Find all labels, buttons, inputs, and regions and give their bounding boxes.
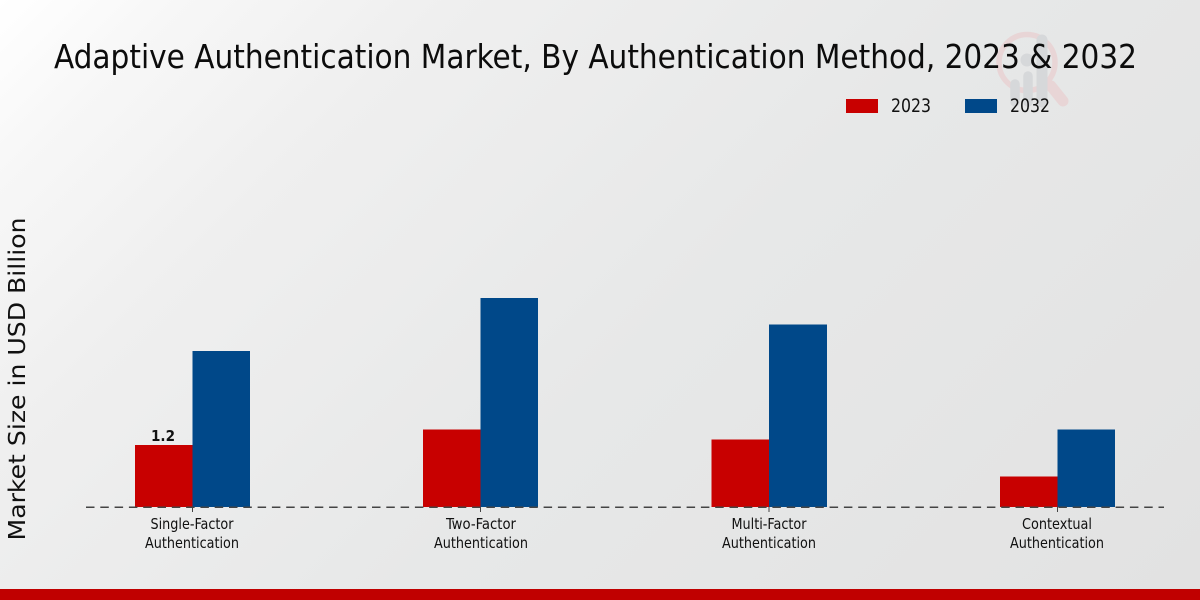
x label: Single-Factor Authentication: Single-Factor [150, 515, 234, 533]
legend item: 2032: 2032 [1010, 95, 1050, 117]
bars: Single-Factor Authentication [135, 351, 250, 507]
title: Adaptive Authentication Market, By Authentication Method, 2023 & 2032 [54, 37, 1137, 76]
bars: Multi-Factor Authentication [712, 324, 827, 507]
x label: Multi-Factor Authentication: Authentication [722, 534, 816, 552]
watermark logo [999, 34, 1063, 102]
x label: Two-Factor Authentication: Two-Factor [445, 515, 516, 533]
legend item: 2023: 2023 [891, 95, 931, 117]
bars: Two-Factor Authentication [423, 298, 538, 507]
y axis title: Market Size in USD Billion [3, 218, 31, 540]
bars: Contextual Authentication [1000, 430, 1115, 507]
x label: Multi-Factor Authentication: Multi-Factor [732, 515, 807, 533]
x label: Two-Factor Authentication: Authentication [434, 534, 528, 552]
x label: Single-Factor Authentication: Authentication [145, 534, 239, 552]
x label: Contextual Authentication: Authentication [1010, 534, 1104, 552]
footer bar [0, 589, 1200, 600]
data label: 1.2: 1.2 [151, 427, 175, 445]
x axis baseline [86, 506, 1164, 508]
legend [846, 95, 1050, 117]
x label: Contextual Authentication: Contextual [1022, 515, 1092, 533]
legend item: 2032 [965, 95, 1050, 117]
legend item: 2023 [846, 95, 931, 117]
